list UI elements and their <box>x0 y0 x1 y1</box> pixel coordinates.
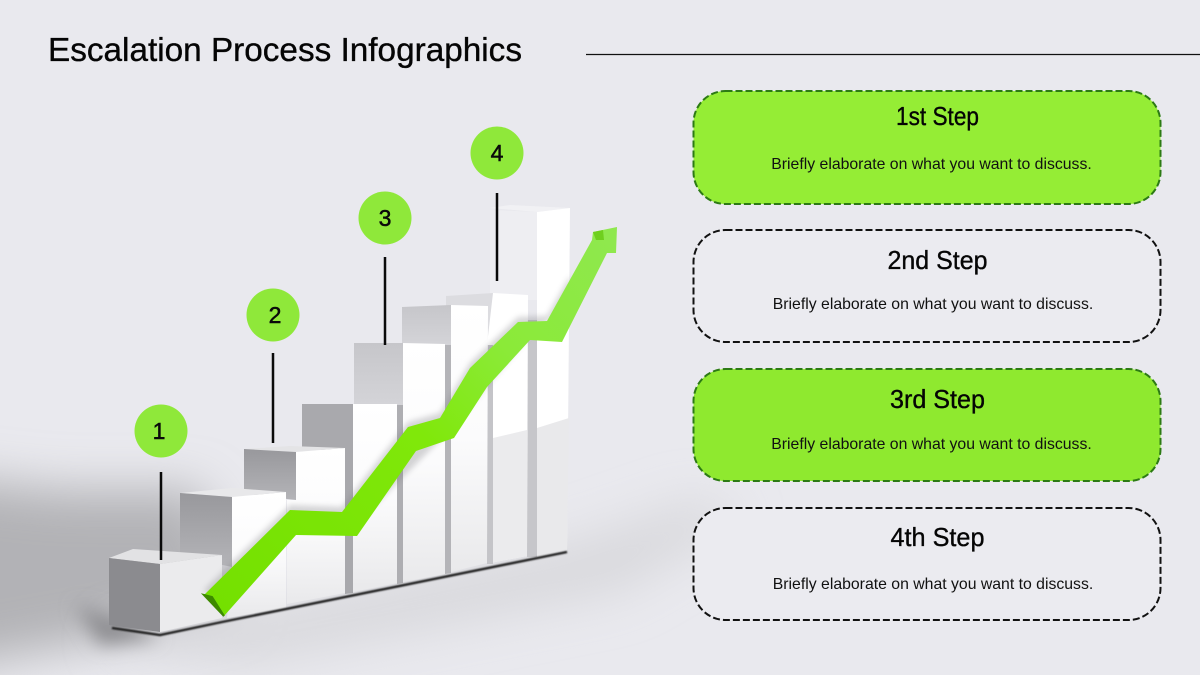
marker 3 circle <box>358 192 412 244</box>
base shadow <box>112 552 567 635</box>
panel: 2nd step <box>694 230 1160 342</box>
marker 3 number: 3 <box>379 205 391 231</box>
card 1 background <box>694 91 1160 204</box>
marker 3 leader <box>384 257 386 345</box>
bar 5 <box>354 343 445 584</box>
card 4 heading: 4th Step <box>890 522 984 552</box>
panel: 4th step <box>694 508 1160 620</box>
card 2 heading: 2nd Step <box>888 245 988 275</box>
marker 4 circle <box>470 126 524 180</box>
card 2 text: Briefly elaborate on what you want to discuss. <box>773 296 1093 313</box>
bar 3 <box>244 446 345 604</box>
title: Escalation Process Infographics <box>48 31 522 68</box>
marker 2 <box>246 288 300 443</box>
marker 4 number: 4 <box>491 140 504 166</box>
title rule <box>586 54 1200 56</box>
card 1 heading: 1st Step <box>896 101 979 131</box>
marker 1 circle <box>134 404 188 458</box>
bar 7 <box>446 293 528 564</box>
card 2 background <box>694 230 1160 342</box>
marker 4 leader <box>496 193 498 281</box>
card 3 text: Briefly elaborate on what you want to discuss. <box>771 436 1092 453</box>
arrow tail fold <box>204 595 224 616</box>
bar 1 <box>109 549 222 632</box>
bar 4 <box>302 404 397 594</box>
card 4 background <box>694 508 1160 620</box>
card 4 text: Briefly elaborate on what you want to discuss. <box>773 576 1093 593</box>
floor shadow <box>0 470 740 675</box>
bar 6 <box>402 305 488 574</box>
3D bar chart <box>109 205 570 635</box>
panel: 1st step <box>694 91 1160 204</box>
marker 1 leader <box>160 472 162 560</box>
marker 1 <box>134 404 188 560</box>
marker 3 <box>358 192 412 345</box>
arrow head detail <box>593 230 604 240</box>
arrow soft shadow <box>204 276 575 605</box>
card 3 heading: 3rd Step <box>890 384 985 414</box>
marker 4 <box>470 126 524 281</box>
marker 2 number: 2 <box>269 302 281 328</box>
marker 2 leader <box>272 353 274 443</box>
bar 2 <box>180 488 286 618</box>
marker 1 number: 1 <box>153 418 165 444</box>
bar 8 <box>490 205 570 557</box>
arrow body <box>204 227 617 616</box>
card 1 text: Briefly elaborate on what you want to discuss. <box>771 156 1092 173</box>
panel: 3rd step <box>694 369 1160 481</box>
green rising arrow <box>204 227 617 616</box>
card 3 background <box>694 369 1160 481</box>
marker 2 circle <box>246 288 300 342</box>
